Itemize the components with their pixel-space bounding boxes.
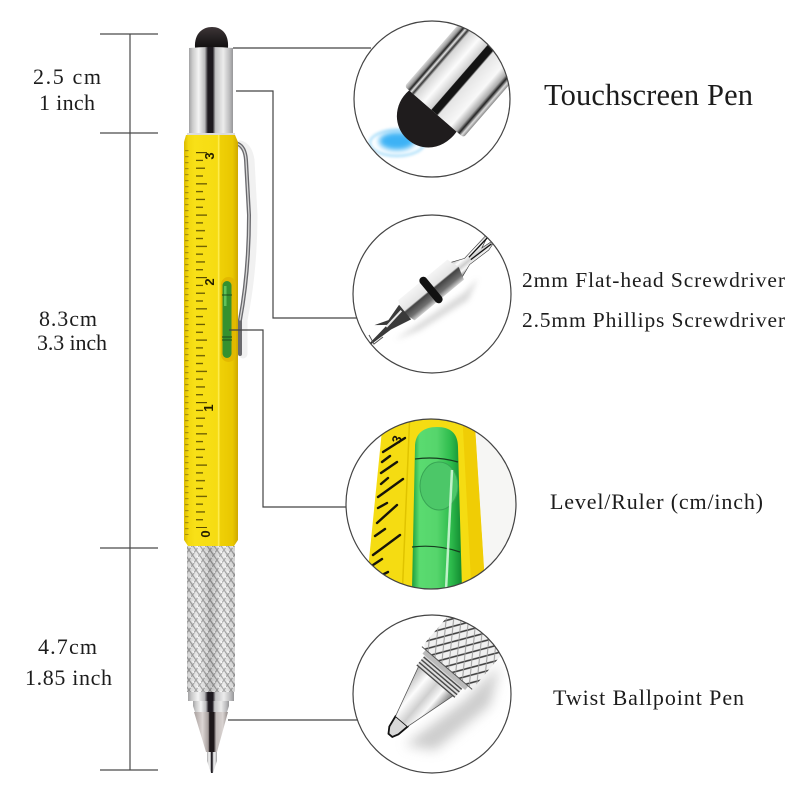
clip reflection — [476, 432, 516, 570]
detail circle backdrop — [346, 419, 516, 589]
detail circle backdrop — [353, 215, 511, 373]
ruler digits: 2 — [202, 278, 217, 286]
label: screwdriver specs: 2.5mm Phillips Screwdriver — [522, 308, 785, 332]
cap collar — [187, 133, 235, 137]
label: screwdriver specs: 2mm Flat-head Screwdriver — [522, 268, 785, 292]
zoomed level — [368, 420, 516, 588]
writing tip — [207, 752, 217, 773]
detail: screwdriver bit — [350, 215, 511, 373]
ruler digits: 0 — [198, 530, 213, 538]
yellow body — [368, 420, 484, 586]
inch ruler minor marks — [185, 150, 190, 535]
circle outline — [353, 615, 511, 773]
thread rings — [193, 701, 229, 712]
pen illustration — [184, 27, 253, 773]
circle outline — [354, 21, 510, 177]
ruler digits: 1 — [201, 404, 216, 412]
chrome cap — [189, 47, 233, 134]
zoomed screwdriver — [368, 236, 493, 345]
shadow — [402, 282, 476, 338]
heading: touchscreen pen: Touchscreen Pen — [544, 78, 753, 112]
pocket clip — [238, 144, 253, 354]
knurled grip — [187, 546, 235, 692]
dimension scale — [100, 34, 158, 770]
spirit level — [221, 277, 236, 362]
label: grip length: 1.85 inch — [25, 665, 112, 690]
detail: touchscreen tip — [353, 20, 511, 178]
bubble — [420, 462, 458, 510]
ball point cone — [194, 712, 228, 752]
label: grip length: 4.7cm — [38, 634, 97, 659]
zoomed stylus — [368, 26, 508, 159]
stylus tip — [195, 27, 228, 48]
leader lines — [228, 48, 371, 720]
detail: level and ruler — [345, 418, 517, 590]
label: cap length — [33, 64, 101, 115]
lower collar — [188, 692, 234, 701]
shadow — [405, 665, 500, 750]
grip shading — [187, 546, 235, 692]
ruler ticks — [196, 152, 208, 528]
ruler digits — [198, 152, 217, 538]
label: body length: 3.3 inch — [37, 330, 107, 355]
point assembly — [388, 617, 500, 738]
label: cap length: 1 inch — [39, 90, 95, 115]
ruler digits: 3 — [202, 152, 217, 160]
blade hook — [369, 335, 383, 344]
zoomed chrome and dome — [396, 26, 508, 148]
label: ballpoint: Twist Ballpoint Pen — [553, 685, 744, 710]
circle outline — [346, 419, 516, 589]
detail: ballpoint tip — [352, 614, 512, 774]
detail circle backdrop — [353, 615, 511, 773]
circle outline — [353, 215, 511, 373]
ruler ticks — [373, 438, 405, 577]
edge facet — [463, 426, 484, 578]
yellow ruler body — [184, 135, 238, 546]
label: grip length — [25, 634, 112, 690]
label: screwdriver specs — [522, 268, 785, 332]
label: cap length: 2.5 cm — [33, 64, 101, 89]
ruler digit 3: 3 — [388, 433, 405, 445]
vial lines — [412, 458, 460, 552]
vial highlight — [446, 470, 452, 590]
label: body length — [37, 306, 107, 355]
touch ripple — [370, 130, 424, 156]
label: level ruler: Level/Ruler (cm/inch) — [550, 489, 763, 514]
green vial — [412, 427, 462, 590]
zoomed ballpoint — [388, 617, 502, 754]
bit assembly — [370, 236, 493, 344]
detail circle backdrop — [354, 21, 510, 177]
label: body length: 8.3cm — [39, 306, 97, 331]
